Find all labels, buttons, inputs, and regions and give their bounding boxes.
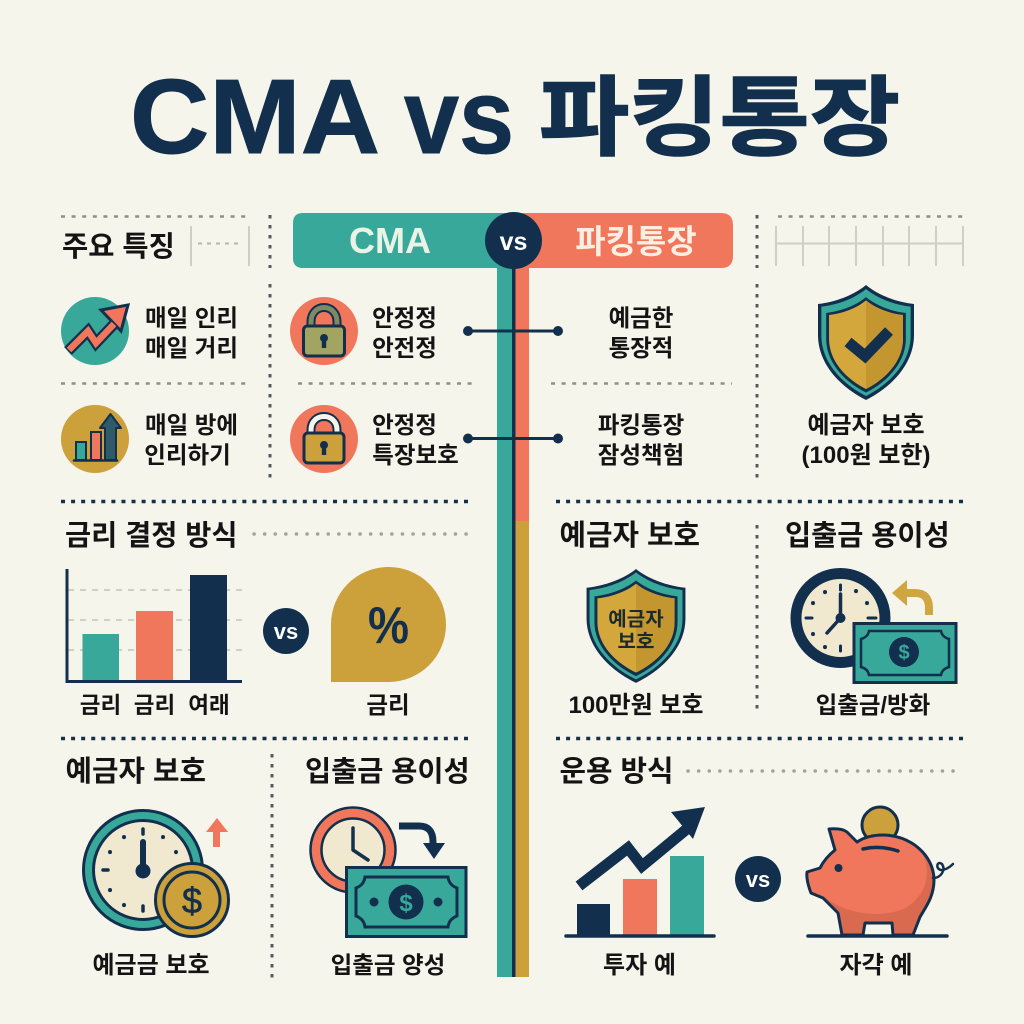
vs badge: vs [274,619,298,644]
icon: clock and banknote: $ [898,642,910,664]
text: 매일 인리 매일 거리 [145,305,238,361]
text: 매일 방에 인리하기: 인리하기 [144,442,231,468]
header: CMA: CMA [349,220,431,261]
text: 안정정 특장보호 [372,412,459,468]
text: 매일 방에 인리하기: 매일 방에 [145,412,238,438]
icon: shield with text [587,569,685,683]
icon: clock and banknote [796,574,956,682]
bar chart [67,569,242,682]
connector: row 1 [463,326,563,336]
vs badge [485,212,542,269]
icon: clock and coin: $ [182,880,202,921]
panel: rate decision [61,502,468,738]
vs badge: vs [500,228,527,256]
chart labels: 금리 [80,693,121,718]
title: CMA [130,58,380,176]
chart: investment growth [566,807,714,936]
text: 예금자 보호 (100원 보한): 예금자 보호 [807,412,925,439]
label: 입출금/방화: 입출금/방화 [816,692,930,718]
icon: shield with text: 보호 [618,632,654,653]
icon: bars with arrow [61,405,129,473]
text: 예금한 통장적: 통장적 [609,335,673,361]
heading: 주요 특징: 주요 특징 [62,231,175,263]
label: 100만원 보호: 100만원 보호 [568,692,704,719]
panel: deposit withdrawal ease (CMA) [305,756,470,978]
vs badge [735,856,781,902]
panel: deposit withdrawal ease (parking) [757,520,956,718]
icon: lock olive [290,297,358,365]
heading: 입출금 용이성: 입출금 용이성 [305,756,470,788]
heading: 운용 방식: 운용 방식 [560,756,673,788]
heading: 입출금 용이성: 입출금 용이성 [785,520,950,552]
title: 파킹통장 [539,70,900,167]
icon: shield with text: 예금자 [608,609,664,630]
panel: depositor protection (CMA) [66,754,272,979]
label: 금리: 금리 [366,692,410,718]
label: 입출금 양성: 입출금 양성 [331,952,445,978]
heading: 금리 결정 방식: 금리 결정 방식 [65,520,238,552]
text: 안정정 안전정: 안전정 [372,335,437,361]
text: 매일 방에 인리하기 [144,412,238,468]
comparison header [293,212,733,269]
text: 파킹통장 잠성책험: 파킹통장 [598,412,684,438]
text: 안정정 안전정 [372,305,437,361]
central comparison spine [497,260,529,977]
text: 안정정 안전정: 안정정 [372,305,437,331]
label: 예금금 보호: 예금금 보호 [92,952,210,979]
text: 안정정 특장보호: 안정정 [372,412,437,438]
header: 파킹통장: 파킹통장 [575,223,697,260]
icon: percent drop: % [368,597,409,655]
panel: key features [61,215,965,480]
text: 파킹통장 잠성책험 [598,412,684,468]
text: 안정정 특장보호: 특장보호 [372,442,459,468]
chart labels: 금리 [134,693,175,718]
panel: depositor protection (parking) [556,502,963,738]
chart labels [80,693,230,718]
text: 매일 인리 매일 거리: 매일 거리 [145,335,238,361]
title: vs [404,58,514,176]
icon: rising arrow [61,297,129,365]
header: CMA [293,213,515,268]
heading: 예금자 보호: 예금자 보호 [560,520,700,552]
connector: row 2 [463,434,563,444]
icon: percent drop [331,567,446,682]
label: 투자 예: 투자 예 [603,952,676,979]
header: 파킹통장 [515,213,733,268]
vs badge: vs [746,867,770,892]
text: 예금자 보호 (100원 보한): (100원 보한) [802,442,930,469]
label: 자갹 예: 자갹 예 [840,952,912,979]
chart labels: 여래 [188,693,230,718]
icon: clock and banknote: $ [399,890,413,917]
text: 예금자 보호 (100원 보한) [802,412,930,469]
panel: operating method [560,756,962,979]
icon: piggy bank [807,807,953,936]
icon: clock and coin [84,810,228,936]
icon: clock and banknote [310,808,466,936]
text: 예금한 통장적 [609,305,673,361]
text: 매일 인리 매일 거리: 매일 인리 [145,305,238,331]
icon: shield check [818,285,914,400]
title [130,58,900,176]
heading: 예금자 보호: 예금자 보호 [66,756,206,788]
icon: lock gold [290,405,358,473]
text: 예금한 통장적: 예금한 [609,305,673,331]
vs badge [263,608,309,654]
text: 파킹통장 잠성책험: 잠성책험 [598,442,684,468]
